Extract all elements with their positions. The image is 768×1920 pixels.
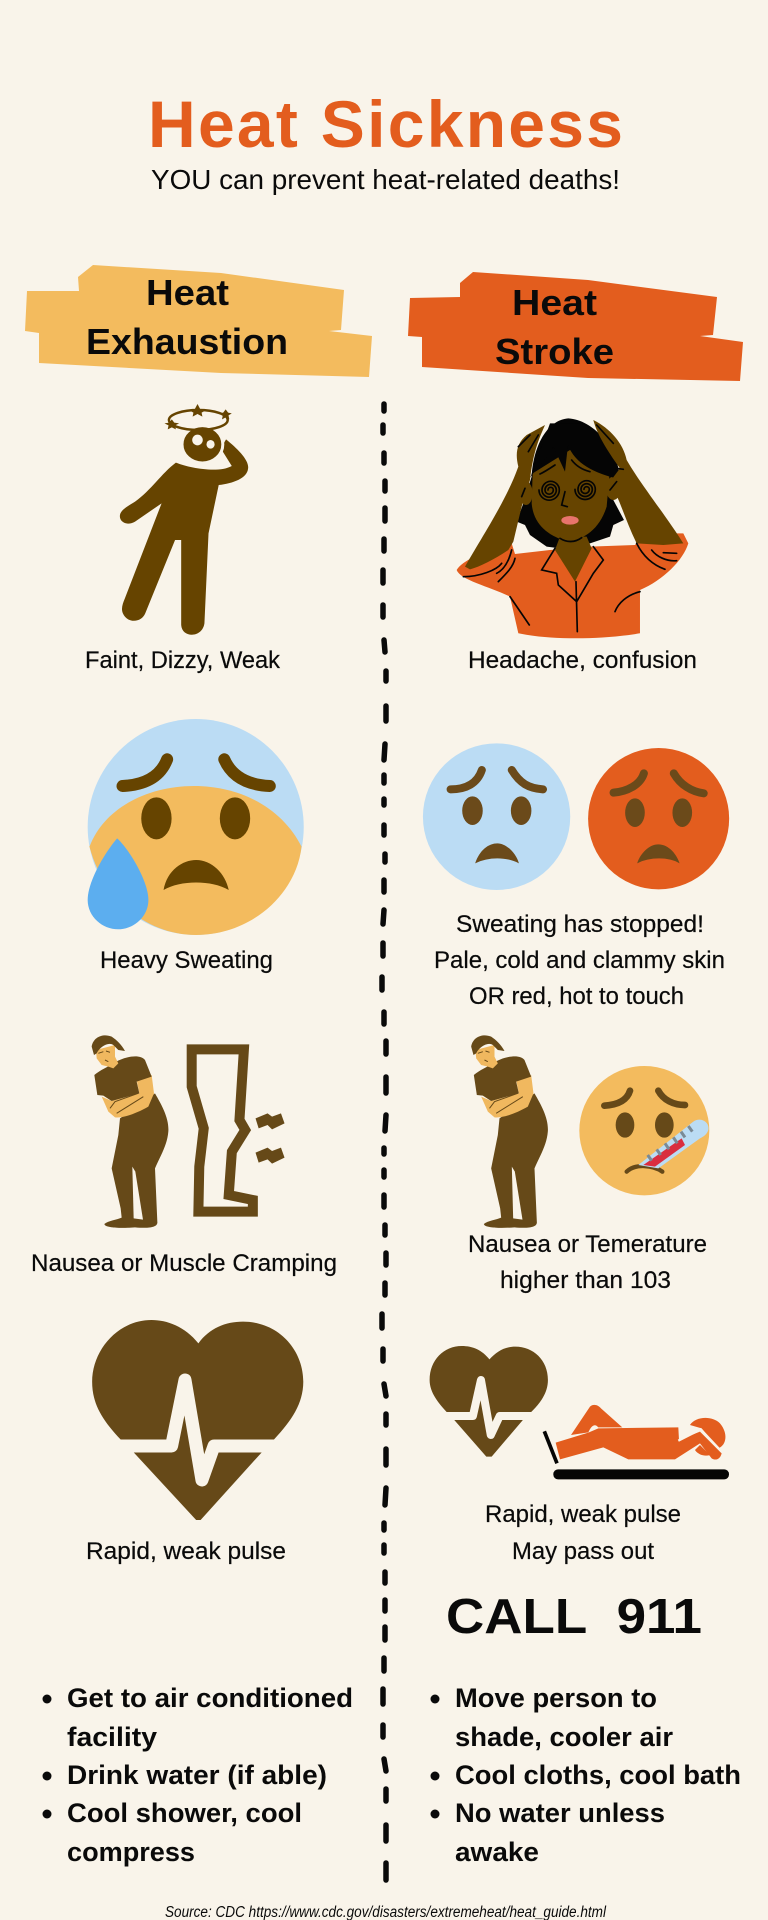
dashed divider — [382, 404, 386, 1880]
text block: sweating has stopped: OR red, hot to touch — [469, 983, 684, 1010]
panel: heat exhaustion banner — [25, 265, 372, 377]
icon: fever face with thermometer — [579, 1066, 709, 1195]
icon: person passed out — [544, 1405, 729, 1479]
list: heat exhaustion actions: compress — [67, 1837, 195, 1867]
list: heat exhaustion actions: facility — [67, 1722, 157, 1752]
list: heat stroke actions: awake — [455, 1837, 539, 1867]
panel: heat stroke banner — [408, 272, 743, 381]
text block: nausea or temperature: Nausea or Temerature — [468, 1231, 707, 1258]
icon: pale face — [423, 743, 570, 890]
icon: dizzy person — [120, 404, 248, 635]
list: heat exhaustion actions: Cool shower, cool — [67, 1798, 302, 1828]
text block: rapid weak pulse right: Rapid, weak pulse — [485, 1501, 681, 1528]
subtitle: YOU can prevent heat-related deaths! — [151, 164, 620, 195]
text block: rapid weak pulse right: May pass out — [512, 1538, 654, 1565]
title: Heat Sickness — [148, 87, 623, 161]
icon: cramping leg — [192, 1049, 285, 1212]
list: heat stroke actions: shade, cooler air — [455, 1722, 673, 1752]
list: heat stroke actions: No water unless — [455, 1798, 665, 1828]
list: heat exhaustion actions — [42, 1683, 353, 1867]
list: heat stroke actions: Cool cloths, cool bath — [455, 1760, 741, 1790]
panel: heat stroke banner: Stroke — [495, 331, 614, 372]
list: heat exhaustion actions: Drink water (if able) — [67, 1760, 327, 1790]
label: nausea or muscle cramping: Nausea or Muscle Cramping — [31, 1250, 337, 1277]
label: heavy sweating: Heavy Sweating — [100, 947, 273, 974]
text block: nausea or temperature: higher than 103 — [500, 1267, 671, 1294]
list: heat exhaustion actions: Get to air conditioned — [67, 1683, 353, 1713]
icon: red face — [588, 748, 729, 889]
icon: heavy sweating face — [88, 719, 304, 935]
call to action: call 911: CALL 911 — [446, 1590, 702, 1644]
icon: small heart with pulse — [430, 1346, 548, 1457]
label: headache confusion: Headache, confusion — [468, 647, 697, 674]
panel: heat exhaustion banner: Heat — [146, 272, 229, 313]
icon: large heart with pulse — [92, 1320, 303, 1520]
list: heat stroke actions — [430, 1683, 741, 1867]
icon: nauseous woman right — [471, 1035, 548, 1228]
panel: heat exhaustion banner: Exhaustion — [86, 321, 288, 362]
text block: sweating has stopped — [434, 911, 725, 1010]
text block: sweating has stopped: Pale, cold and clammy skin — [434, 947, 725, 974]
label: faint dizzy weak: Faint, Dizzy, Weak — [85, 647, 281, 674]
icon: woman with headache — [457, 418, 688, 638]
text block: nausea or temperature — [468, 1231, 707, 1294]
text block: rapid weak pulse right — [485, 1501, 681, 1565]
icon: nauseous woman — [92, 1035, 168, 1228]
label: rapid weak pulse left: Rapid, weak pulse — [86, 1538, 286, 1565]
text block: sweating has stopped: Sweating has stopped! — [456, 911, 704, 938]
list: heat stroke actions: Move person to — [455, 1683, 657, 1713]
panel: heat stroke banner: Heat — [512, 282, 597, 323]
